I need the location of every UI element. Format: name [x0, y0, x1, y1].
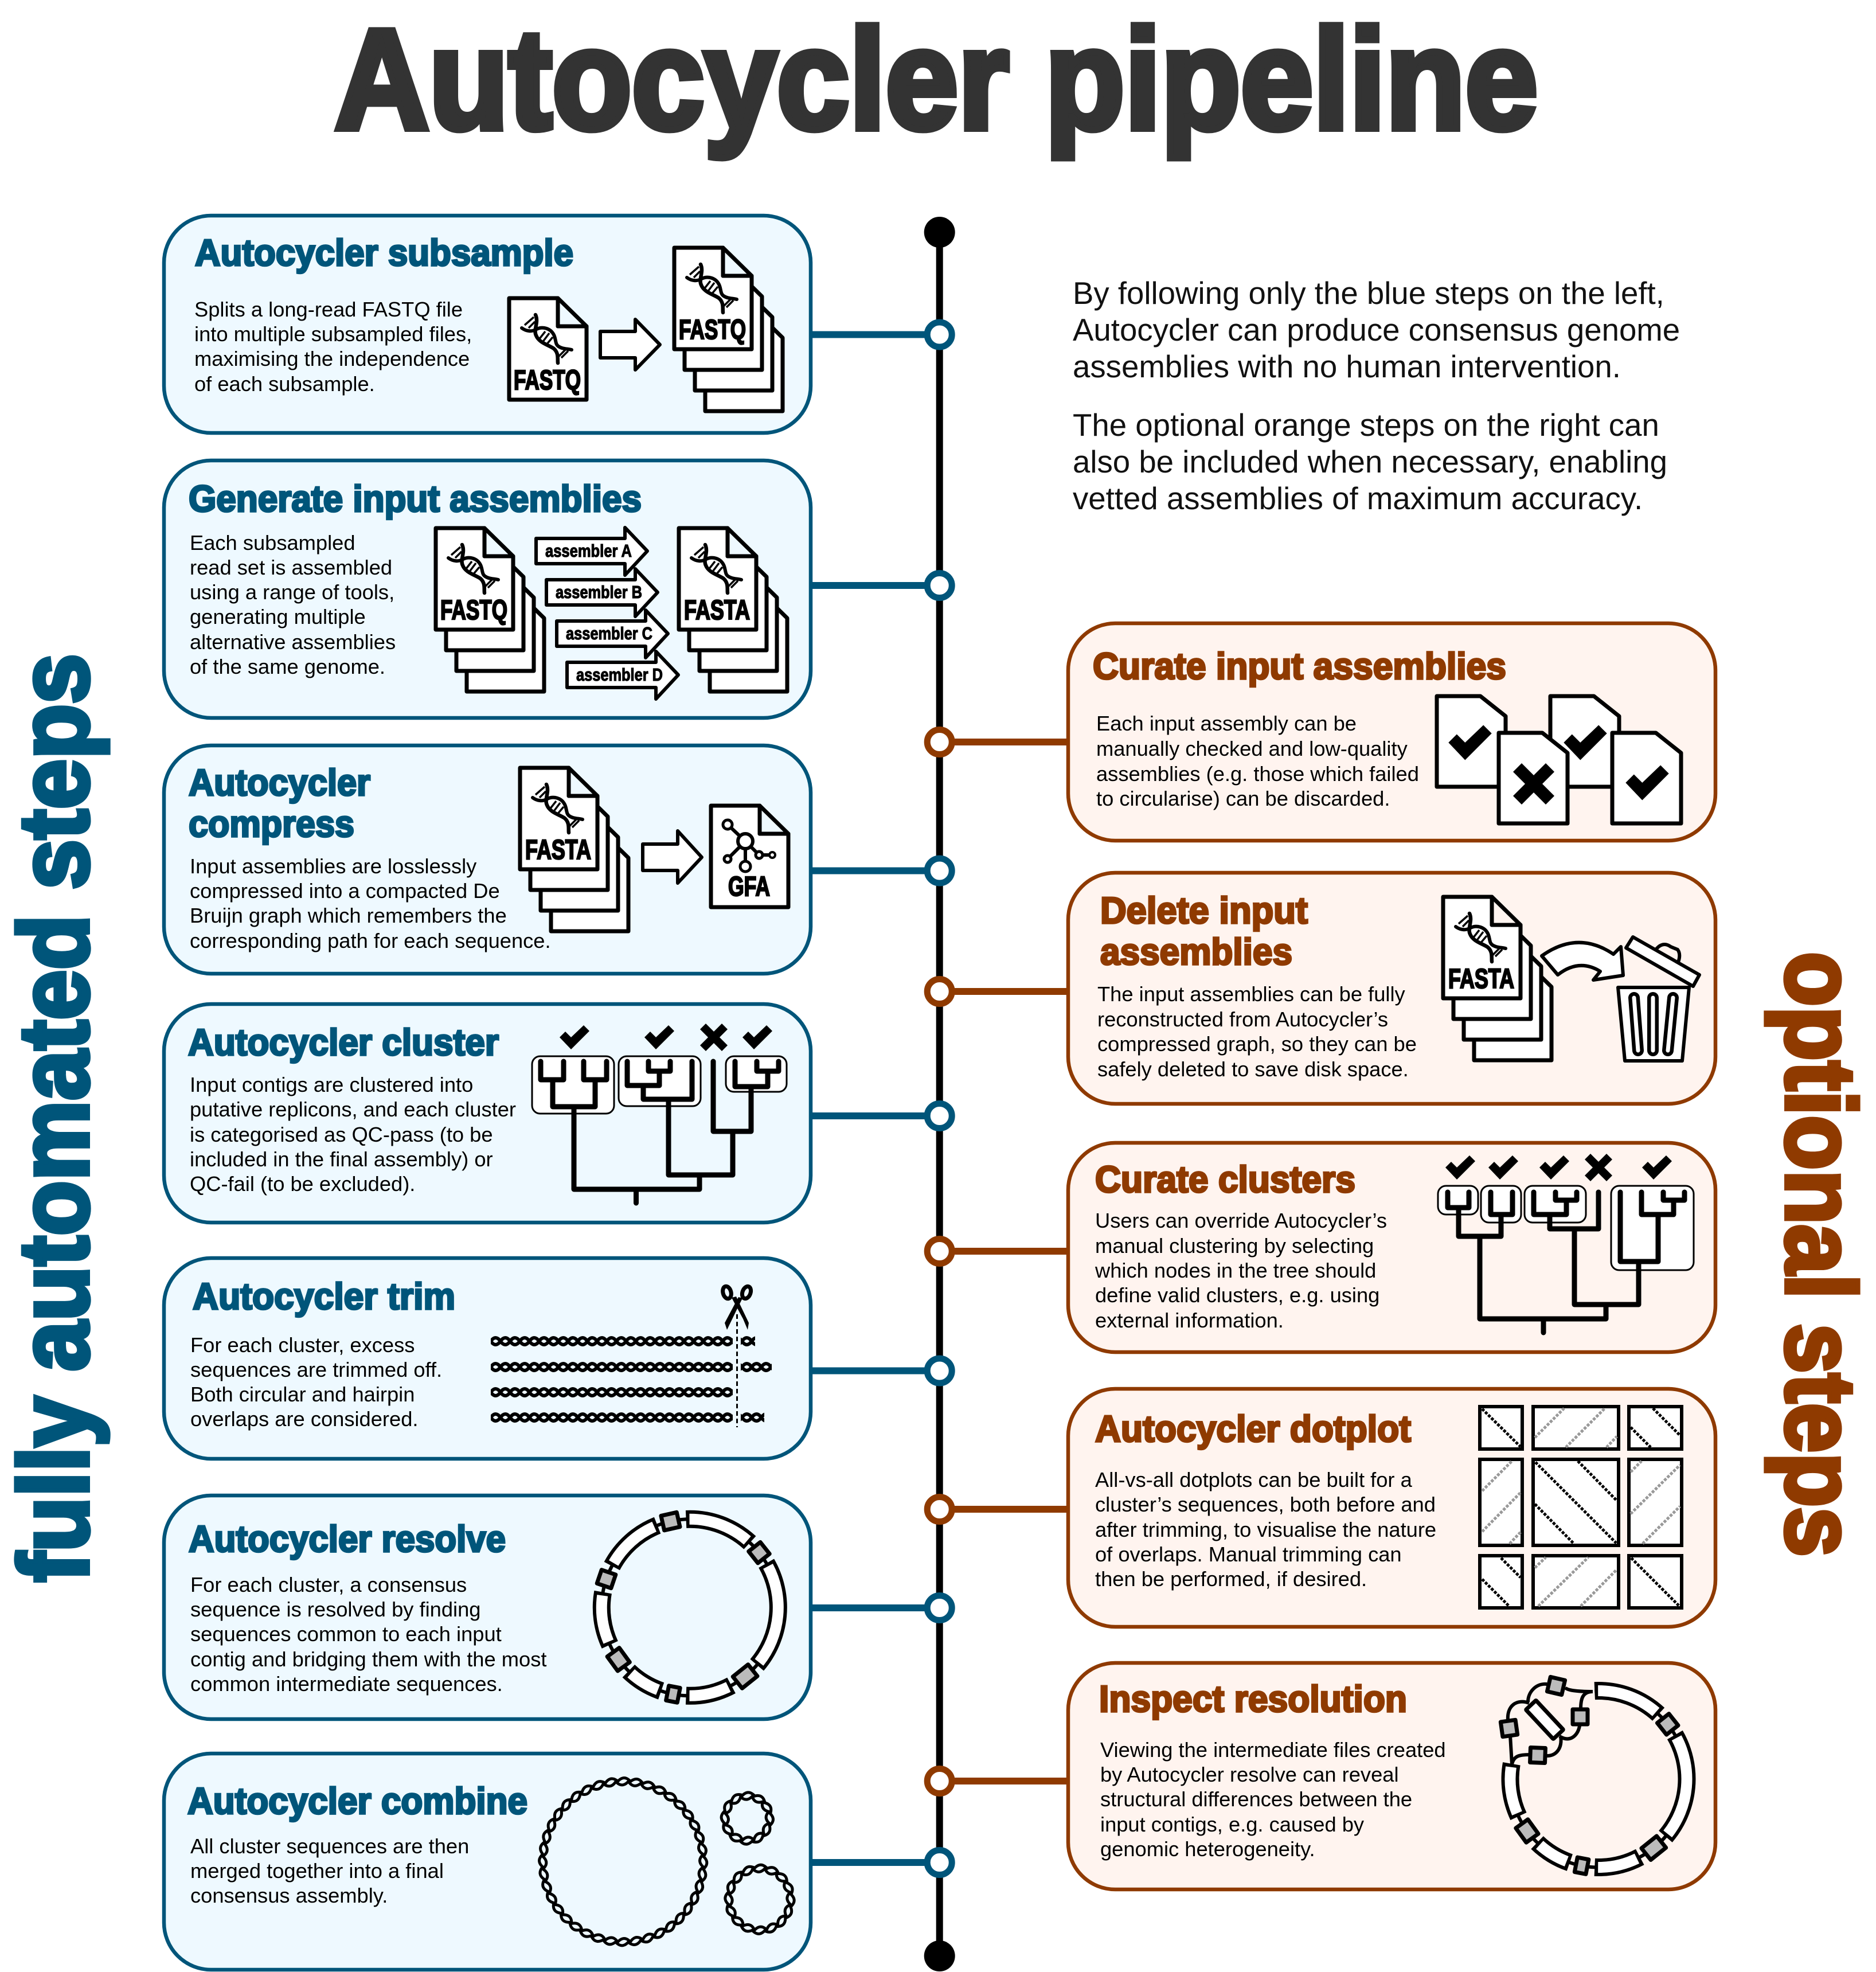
- description: Users can override Autocycler’s: [1095, 1209, 1387, 1232]
- description: after trimming, to visualise the nature: [1095, 1518, 1436, 1541]
- heading: compress: [189, 803, 354, 845]
- icon: stack of FASTQ files: [436, 528, 544, 692]
- arrow: assembler B: assembler B: [556, 582, 642, 602]
- arrow: assembler A: assembler A: [545, 541, 632, 561]
- intro text: By following only the blue steps on the left,: [1073, 276, 1664, 311]
- description: Input contigs are clustered into: [190, 1073, 473, 1096]
- description: merged together into a final: [190, 1859, 444, 1883]
- description: using a range of tools,: [190, 580, 394, 604]
- icon: GFA graph file: [711, 806, 788, 907]
- description: into multiple subsampled files,: [194, 322, 472, 346]
- icon: stack of FASTQ files: [674, 248, 783, 411]
- arrow: assembler D: assembler D: [576, 665, 663, 685]
- description: QC-fail (to be excluded).: [190, 1172, 415, 1196]
- description: safely deleted to save disk space.: [1097, 1057, 1409, 1081]
- icon: medium twisted circle: [725, 1865, 794, 1934]
- icon: trimmed sequences: [491, 1314, 772, 1427]
- intro text: vetted assemblies of maximum accuracy.: [1073, 481, 1643, 516]
- icon: stack of FASTQ files: FASTQ: [679, 315, 746, 345]
- arrow: assembler C: assembler C: [566, 623, 652, 643]
- title: Autocycler pipeline: [335, 0, 1538, 159]
- panel: Autocycler compress: [164, 745, 811, 974]
- intro text: assemblies with no human intervention.: [1073, 349, 1621, 384]
- arrow: assembler A: [536, 528, 647, 575]
- icon: scissors: [721, 1285, 752, 1330]
- description: compressed graph, so they can be: [1097, 1032, 1417, 1056]
- heading: Autocycler trim: [193, 1275, 455, 1317]
- description: cluster’s sequences, both before and: [1095, 1493, 1436, 1516]
- icon: stack of FASTA files: FASTA: [1448, 964, 1514, 994]
- description: by Autocycler resolve can reveal: [1100, 1763, 1399, 1786]
- panel: Autocycler trim: [164, 1258, 811, 1459]
- heading: Autocycler resolve: [189, 1518, 506, 1560]
- arrow: [600, 319, 660, 370]
- description: to circularise) can be discarded.: [1096, 787, 1390, 810]
- panel: Curate input assemblies: [1068, 623, 1715, 841]
- description: common intermediate sequences.: [190, 1672, 503, 1696]
- icon: large twisted circle: [540, 1778, 707, 1946]
- description: All cluster sequences are then: [190, 1834, 469, 1858]
- description: alternative assemblies: [190, 630, 396, 654]
- description: All-vs-all dotplots can be built for a: [1095, 1468, 1413, 1491]
- panel: Autocycler subsample: [164, 216, 811, 433]
- description: structural differences between the: [1100, 1787, 1412, 1811]
- description: Each subsampled: [190, 531, 355, 554]
- intro text: also be included when necessary, enabling: [1073, 444, 1667, 479]
- heading: Generate input assemblies: [189, 478, 642, 520]
- arrow: [643, 831, 702, 883]
- icon: trash bin: [1618, 937, 1699, 1061]
- description: generating multiple: [190, 605, 366, 628]
- heading: Delete input: [1100, 889, 1308, 931]
- description: Both circular and hairpin: [190, 1383, 415, 1406]
- description: assemblies (e.g. those which failed: [1096, 762, 1419, 786]
- description: compressed into a compacted De: [190, 879, 500, 903]
- heading: Autocycler combine: [187, 1780, 527, 1822]
- description: contig and bridging them with the most: [190, 1647, 546, 1671]
- description: define valid clusters, e.g. using: [1095, 1283, 1379, 1307]
- panel: Inspect resolution: [1068, 1658, 1719, 1900]
- description: Bruijn graph which remembers the: [190, 904, 507, 927]
- description: then be performed, if desired.: [1095, 1567, 1367, 1591]
- description: Viewing the intermediate files created: [1100, 1738, 1446, 1762]
- description: overlaps are considered.: [190, 1407, 418, 1431]
- intro text: The optional orange steps on the right can: [1073, 408, 1659, 443]
- icon: GFA graph file: GFA: [728, 872, 770, 902]
- icon: resolved ring: [569, 1487, 811, 1728]
- description: which nodes in the tree should: [1095, 1259, 1376, 1282]
- icon: cluster tree: [532, 1024, 787, 1203]
- icon: stack of FASTQ files: FASTQ: [440, 595, 507, 626]
- description: reconstructed from Autocycler’s: [1097, 1008, 1388, 1031]
- icon: stack of FASTA files: FASTA: [684, 595, 750, 626]
- description: of each subsample.: [194, 372, 375, 396]
- arrow: assembler B: [546, 569, 658, 616]
- description: Each input assembly can be: [1096, 712, 1357, 735]
- icon: ring with structural variants: [1478, 1658, 1719, 1900]
- heading: assemblies: [1100, 931, 1292, 973]
- panel: Curate clusters: [1068, 1143, 1715, 1352]
- icon: FASTQ file: [509, 298, 587, 400]
- heading: Inspect resolution: [1099, 1678, 1407, 1720]
- description: corresponding path for each sequence.: [190, 929, 551, 952]
- panel: Autocycler combine: [164, 1754, 811, 1970]
- icon: stack of FASTA files: [679, 528, 787, 692]
- description: manual clustering by selecting: [1095, 1234, 1374, 1258]
- panel: Delete input assemblies: [1068, 873, 1715, 1104]
- icon: dotplot grid: [1480, 1407, 1682, 1608]
- description: Input assemblies are losslessly: [190, 854, 477, 878]
- description: consensus assembly.: [190, 1884, 388, 1907]
- description: of the same genome.: [190, 655, 385, 678]
- description: is categorised as QC-pass (to be: [190, 1123, 493, 1146]
- heading: Autocycler dotplot: [1095, 1408, 1411, 1450]
- description: included in the final assembly) or: [190, 1147, 493, 1171]
- description: manually checked and low-quality: [1096, 737, 1408, 760]
- description: sequence is resolved by finding: [190, 1598, 480, 1621]
- panel: Autocycler cluster: [164, 1004, 811, 1223]
- icon: checked and rejected files: [1437, 696, 1681, 823]
- description: The input assemblies can be fully: [1097, 982, 1406, 1006]
- icon: stack of FASTA files: FASTA: [525, 835, 591, 865]
- panel: Autocycler resolve: [164, 1487, 811, 1728]
- panel: Autocycler dotplot: [1068, 1389, 1715, 1627]
- arrow: curved to bin: [1542, 943, 1623, 980]
- description: read set is assembled: [190, 556, 392, 579]
- arrow: assembler C: [557, 610, 668, 658]
- heading: Curate input assemblies: [1093, 645, 1506, 687]
- timeline: [811, 217, 1069, 1971]
- icon: stack of FASTA files: [1443, 897, 1551, 1060]
- description: external information.: [1095, 1309, 1284, 1332]
- description: maximising the independence: [194, 347, 470, 370]
- heading: Autocycler cluster: [188, 1021, 499, 1063]
- icon: small twisted circle: [721, 1793, 773, 1844]
- description: For each cluster, a consensus: [190, 1573, 467, 1596]
- description: sequences common to each input: [190, 1622, 502, 1646]
- intro text: Autocycler can produce consensus genome: [1073, 313, 1680, 347]
- description: sequences are trimmed off.: [190, 1358, 442, 1381]
- heading: Autocycler subsample: [195, 232, 573, 274]
- heading: Autocycler: [189, 762, 370, 803]
- arrow: assembler D: [567, 651, 678, 699]
- description: putative replicons, and each cluster: [190, 1098, 516, 1121]
- description: of overlaps. Manual trimming can: [1095, 1543, 1402, 1566]
- description: Splits a long-read FASTQ file: [194, 298, 463, 321]
- panel: Generate input assemblies: [164, 460, 811, 718]
- description: genomic heterogeneity.: [1100, 1837, 1315, 1861]
- side label: optional steps: optional steps: [1765, 952, 1875, 1557]
- description: input contigs, e.g. caused by: [1100, 1813, 1365, 1836]
- icon: stack of FASTA files: [520, 768, 628, 931]
- icon: cluster tree: [1438, 1154, 1694, 1333]
- heading: Curate clusters: [1095, 1158, 1355, 1200]
- side label: fully automated steps: fully automated steps: [0, 654, 109, 1582]
- icon: FASTQ file: FASTQ: [514, 365, 581, 396]
- description: For each cluster, excess: [190, 1333, 415, 1357]
